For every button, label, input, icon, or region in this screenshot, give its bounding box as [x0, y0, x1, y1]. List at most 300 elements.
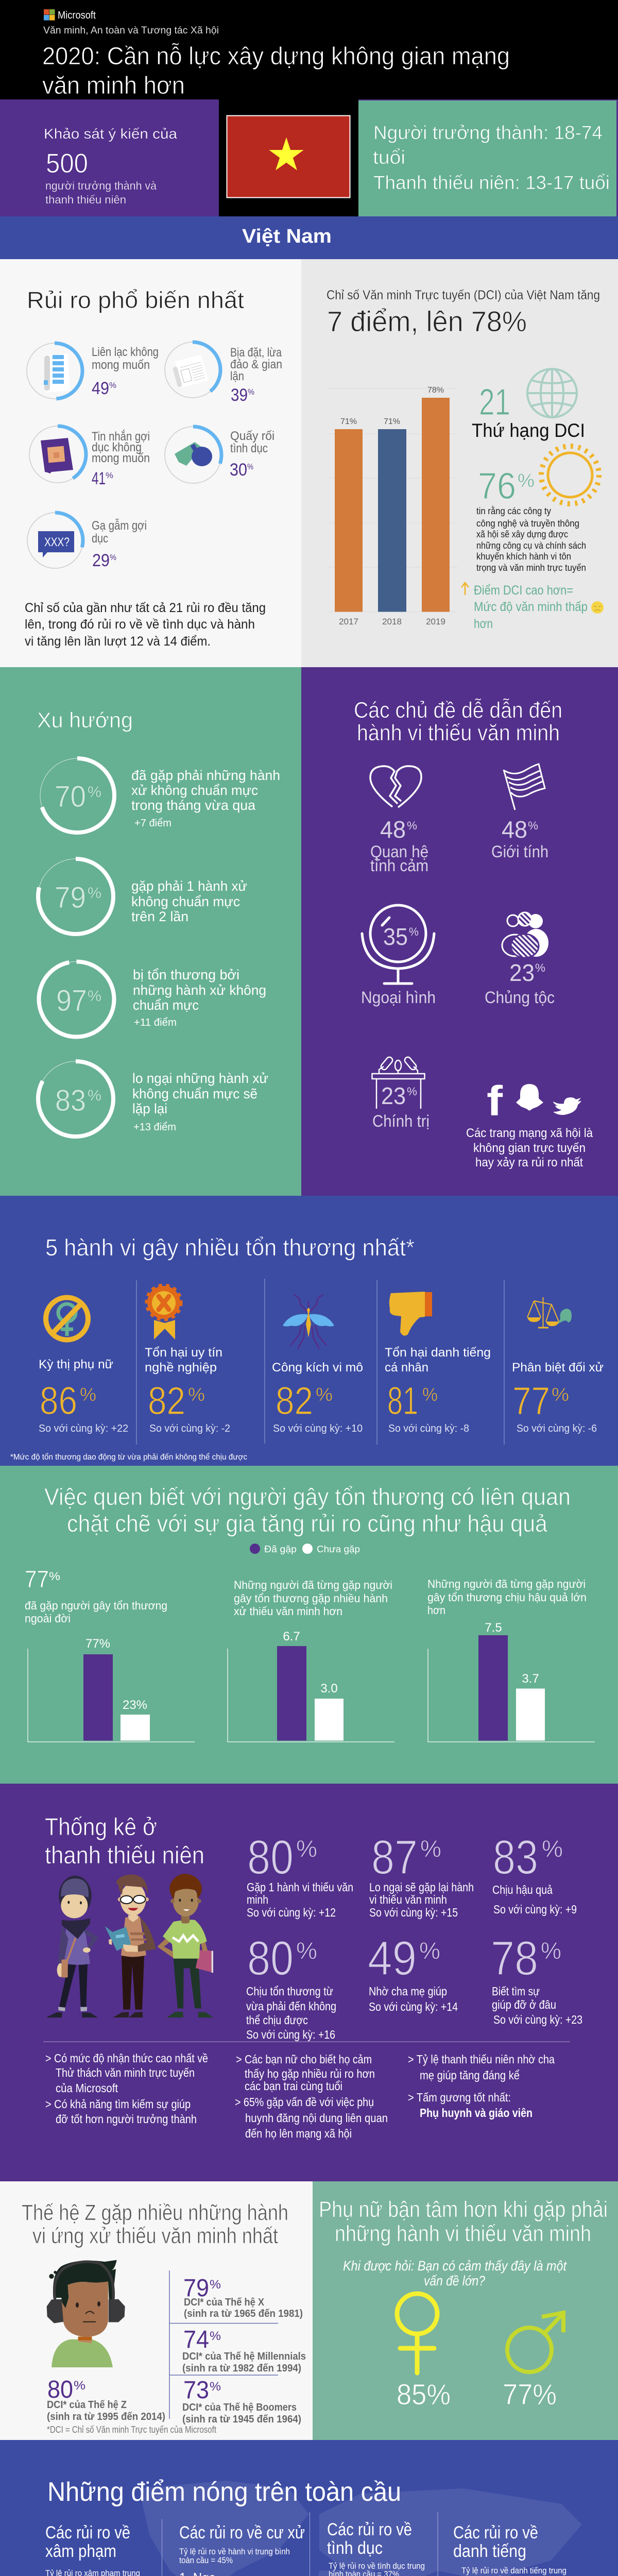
- behaviour: misogyny: 86: [40, 1379, 77, 1423]
- risk: hoaxes and fraud: %: [248, 388, 254, 397]
- stat text: help: So với cùng kỳ: +23: [493, 2013, 582, 2026]
- bullets column 1: của Microsoft: [56, 2081, 118, 2095]
- topic: politics: 23: [381, 1082, 406, 1109]
- panel: survey: Khảo sát ý kiến của: [44, 126, 177, 142]
- topic: appearance: [361, 905, 436, 1007]
- behaviour: misogyny: [39, 1297, 128, 1434]
- bullets column 2: thấy họ gặp nhiều rủi ro hơn: [245, 2067, 375, 2080]
- optimism text: tin rằng các công ty: [476, 505, 551, 516]
- icon: Microsoft logo: [44, 9, 55, 21]
- legend note: hơn: [474, 617, 493, 631]
- panel: survey: 500: [46, 148, 88, 179]
- stat text: worried: [369, 1880, 474, 1919]
- stat text: worried: Lo ngại sẽ gặp lại hành: [369, 1880, 474, 1894]
- behaviour: microaggression: So với cùng kỳ: +10: [273, 1423, 363, 1434]
- panel: women more concerned: [319, 2197, 608, 2411]
- risk: unwanted sexting: Tin nhắn gợi: [92, 430, 150, 444]
- behaviour: microaggression: %: [316, 1384, 333, 1405]
- topic: gender: Giới tính: [491, 842, 548, 861]
- risk: sexual solicitation: %: [110, 553, 116, 562]
- behaviour: microaggression: [272, 1295, 363, 1434]
- topic: gender: %: [528, 819, 538, 832]
- heading: thanh thiếu niên: [45, 1841, 204, 1869]
- column: sexual risks: [327, 2520, 425, 2576]
- social caption: không gian trực tuyến: [473, 1141, 586, 1155]
- stat: Gen X: (sinh ra từ 1965 đến 1981): [184, 2308, 303, 2319]
- topic: race: Chủng tộc: [485, 988, 555, 1007]
- stat: Millennials: 74: [183, 2326, 209, 2353]
- heading: Các chủ đề dễ dẫn đến: [354, 698, 562, 723]
- risk: hoaxes and fraud: 39: [231, 385, 248, 405]
- DCI rank: 21: [479, 382, 510, 423]
- behaviour: professional reputation: 82: [148, 1379, 185, 1423]
- trend 97%: bị tổn thương bởi: [133, 967, 239, 982]
- figure: boy in green shirt: [157, 1874, 213, 2018]
- legend note: Điểm DCI cao hơn=: [474, 583, 573, 598]
- trend 70%: đã gặp phải những hành: [131, 768, 280, 783]
- bar chart: behaviours experienced: [228, 1630, 394, 1742]
- stats row 2: 78: [491, 1931, 538, 1985]
- stat: Gen X: %: [210, 2278, 221, 2292]
- column: sexual risks: Các rủi ro về: [327, 2520, 412, 2539]
- optimism text: khuyến khích hành vi tôn: [476, 551, 571, 562]
- behaviour: personal reputation: [385, 1292, 491, 1434]
- chart note: more behaviours: Những người đã từng gặp người: [234, 1579, 392, 1591]
- risk: sexual harassment: tình dục: [230, 442, 268, 455]
- chart note: more behaviours: gây tổn thương gặp nhiều hành: [234, 1592, 388, 1605]
- panel: survey: người trưởng thành và: [45, 179, 157, 192]
- behaviour: personal reputation: 81: [387, 1379, 418, 1423]
- stat: Gen Z: 80: [47, 2376, 73, 2403]
- stat text: help: Biết tìm sự: [492, 1985, 540, 1998]
- icon: globe: [527, 369, 577, 417]
- stats row 1: 87: [371, 1830, 418, 1884]
- trend 83%: 83: [55, 1084, 86, 1117]
- topic: politics: %: [407, 1085, 417, 1098]
- behaviour: personal reputation: Tổn hại danh tiếng: [385, 1346, 491, 1360]
- topic: appearance: %: [409, 925, 419, 938]
- behaviour: discrimination: Phân biệt đối xử: [512, 1361, 604, 1375]
- bar chart: behaviours experienced: 6.7: [283, 1630, 300, 1643]
- stat: Gen Z: %: [74, 2379, 85, 2393]
- stat text: encountered: Gặp 1 hành vi thiếu văn: [247, 1880, 353, 1894]
- stat text: encountered: So với cùng kỳ: +12: [247, 1906, 336, 1919]
- risk: sexual harassment: 30: [230, 460, 247, 480]
- stat text: encountered: [247, 1880, 353, 1919]
- column: intrusive risks: [45, 2523, 140, 2576]
- panel: ages: Người trưởng thành: 18-74: [373, 122, 603, 143]
- bullets column 1: Thử thách văn minh trực tuyến: [56, 2066, 195, 2079]
- stat: Millennials: %: [210, 2329, 221, 2343]
- trend 83%: %: [88, 1087, 101, 1104]
- icon: male symbol: [507, 2313, 563, 2372]
- trend 97%: những hành xử không: [133, 982, 266, 998]
- heading: [319, 2197, 608, 2246]
- panel: topics: [354, 698, 593, 1170]
- panel: most common risks: [25, 287, 282, 649]
- illustration: teen with headphones: [47, 2260, 125, 2367]
- optimism text: trọng và văn minh trực tuyến: [476, 563, 586, 573]
- icon: facebook: f: [487, 1078, 503, 1125]
- rank label: Thứ hạng DCI: [472, 420, 585, 441]
- chart note: greater consequences: gây tổn thương chịu hậu quả lớn: [427, 1591, 587, 1604]
- question: Khi được hỏi: Bạn có cảm thấy đây là một: [343, 2258, 567, 2274]
- chart note: more behaviours: xử thiếu văn minh hơn: [234, 1605, 342, 1618]
- risk: hoaxes and fraud: đảo & gian: [230, 358, 282, 371]
- title: 2020: Cần nỗ lực xây dựng không gian mạng: [42, 42, 510, 70]
- column: intrusive risks: Các rủi ro về: [45, 2523, 130, 2543]
- icon: Vietnam flag: [227, 115, 350, 198]
- stats row 2: %: [541, 1937, 561, 1964]
- topic: race: 23: [509, 959, 535, 986]
- optimism text: những công cụ và chính sách: [476, 540, 586, 551]
- stat: women: 85%: [397, 2378, 451, 2411]
- stat: Boomers: 73: [183, 2377, 209, 2404]
- behaviour: professional reputation: %: [188, 1384, 205, 1405]
- optimism text: công nghệ và truyền thông: [476, 518, 579, 529]
- illustration: three teens: [46, 1874, 213, 2018]
- risk: sexual solicitation: 29: [92, 551, 110, 570]
- world map: [139, 2481, 582, 2576]
- heading: [45, 1813, 204, 1869]
- stat text: worried: vi thiếu văn minh: [369, 1893, 447, 1906]
- panel: Generation Z: [22, 2200, 306, 2435]
- risk: hoaxes and fraud: lận: [230, 369, 244, 383]
- risk: unwanted sexting: mong muốn: [92, 451, 150, 465]
- risk: sexual harassment: [165, 427, 274, 483]
- stats row 1: %: [420, 1835, 441, 1862]
- stat: Millennials: [182, 2326, 306, 2374]
- risk: hoaxes and fraud: Bịa đặt, lừa: [230, 346, 282, 360]
- panel: global hot spots: [45, 2477, 582, 2576]
- heading: [22, 2200, 288, 2248]
- trend 70%: trong tháng vừa qua: [131, 798, 256, 813]
- bullets column 1: > Có mức độ nhận thức cao nhất về: [45, 2052, 208, 2065]
- column: behavioural risks: [179, 2523, 305, 2576]
- column: intrusive risks: xâm phạm: [45, 2541, 116, 2561]
- panel: teen statistics: [43, 1813, 582, 2140]
- topic: relationships: 48: [380, 816, 406, 843]
- column: behavioural risks: Các rủi ro về cư xử: [179, 2523, 305, 2543]
- summary paragraph: Chỉ số của gần như tất cả 21 rủi ro đều tăng: [25, 601, 266, 615]
- footnote: *Mức độ tổn thương dao động từ vừa phải đến không thể chịu được: [10, 1452, 247, 1462]
- bullets column 2: đến họ lên mạng xã hội: [245, 2127, 352, 2140]
- trend 83%: không chuẩn mực sẽ: [132, 1086, 258, 1101]
- panel: trends: [37, 708, 280, 1137]
- trend 79%: 79: [55, 881, 86, 914]
- risk: unwanted contact: Liên lạc không: [92, 345, 159, 359]
- bullets column 3: > Tỷ lệ thanh thiếu niên nhờ cha: [408, 2053, 555, 2066]
- stats row 1: %: [542, 1835, 563, 1862]
- bullets column 2: > 65% gặp vấn đề với việc phụ: [235, 2095, 374, 2109]
- stat: Gen X: DCI* của Thế hệ X: [184, 2297, 265, 2308]
- stat: men: 77%: [503, 2378, 557, 2411]
- topic: gender: 48: [502, 816, 527, 843]
- stat text: pain: vừa phải đến không: [246, 1999, 336, 2013]
- stat text: encountered: minh: [247, 1893, 268, 1906]
- panel: 5 most painful behaviours: [10, 1234, 604, 1462]
- risk: sexual solicitation: XXX?: [44, 535, 70, 549]
- footnote: *DCI = Chỉ số Văn minh Trực tuyến của Microsoft: [47, 2425, 216, 2435]
- optimism stat: 76: [478, 466, 516, 507]
- column: reputational risks: [453, 2523, 566, 2576]
- stat: Boomers: %: [210, 2380, 221, 2394]
- panel: knowing the offender: [25, 1483, 595, 1742]
- DCI heading: [327, 288, 600, 337]
- risk: sexual harassment: Quấy rối: [230, 429, 274, 443]
- behaviour: discrimination: %: [552, 1384, 569, 1405]
- stats row 1: [247, 1830, 563, 1884]
- behaviour: discrimination: 77: [512, 1379, 550, 1423]
- risk: hoaxes and fraud: [165, 342, 282, 405]
- trend 97%: %: [88, 988, 101, 1005]
- topic: politics: [372, 1056, 430, 1130]
- risk: sexual solicitation: [27, 513, 147, 570]
- panel: survey: thanh thiếu niên: [45, 193, 126, 206]
- trend 97%: +11 điểm: [134, 1017, 177, 1028]
- heading: Thống kê ở: [45, 1813, 157, 1840]
- trend 70%: [40, 758, 280, 833]
- panel: DCI: [327, 288, 604, 631]
- trend 79%: [38, 859, 247, 934]
- summary paragraph: lên, trong đó rủi ro về về tình dục và hành: [25, 617, 255, 632]
- chart note: greater consequences: [427, 1578, 587, 1617]
- behaviour: microaggression: 82: [276, 1379, 313, 1423]
- behaviour: professional reputation: So với cùng kỳ: -2: [149, 1423, 230, 1434]
- topic: relationships: Quan hệ: [370, 842, 428, 861]
- bullets column 2: > Các bạn nữ cho biết họ cảm: [236, 2053, 372, 2066]
- subtitle: Văn minh, An toàn và Tương tác Xã hội: [43, 25, 219, 36]
- heading: vi ứng xử thiếu văn minh nhất: [32, 2224, 278, 2248]
- risk: unwanted sexting: %: [106, 471, 113, 480]
- stat: Gen X: [183, 2275, 303, 2319]
- risk: sexual solicitation: dục: [92, 532, 108, 546]
- trend 79%: %: [88, 885, 101, 902]
- stat text: consequences: Chịu hậu quả: [492, 1883, 553, 1896]
- question: [343, 2258, 567, 2289]
- column: reputational risks: Các rủi ro về: [453, 2523, 538, 2543]
- legend note: [474, 583, 588, 631]
- optimism text: xã hội sẽ xây dựng được: [476, 529, 568, 539]
- bullets column 3: mẹ giúp tăng đáng kể: [420, 2069, 520, 2082]
- column: behavioural risks: Tỷ lệ rủi ro về hành vi trung bình: [179, 2547, 290, 2556]
- stat: Boomers: DCI* của Thế hệ Boomers: [182, 2402, 297, 2413]
- bar chart: met offender: 77%: [85, 1637, 110, 1651]
- topic: appearance: Ngoại hình: [361, 988, 436, 1007]
- bar chart: behaviours experienced: 3.0: [320, 1682, 338, 1696]
- stat: Millennials: DCI* của Thế hệ Millennials: [182, 2351, 306, 2362]
- trend 97%: [39, 961, 266, 1037]
- trend 79%: trên 2 lần: [131, 909, 188, 924]
- stat: Millennials: (sinh ra từ 1982 đến 1994): [182, 2363, 301, 2374]
- risk: unwanted contact: [27, 343, 159, 399]
- chart note: greater consequences: hơn: [427, 1604, 445, 1617]
- heading: chặt chẽ với sự gia tăng rủi ro cũng như hậu quả: [67, 1510, 547, 1537]
- stat: 77%: 77: [25, 1566, 49, 1592]
- bar chart: DCI by year: [328, 386, 457, 626]
- social caption: [466, 1126, 593, 1170]
- bar chart: consequences: 3.7: [522, 1672, 539, 1686]
- stat text: pain: Chịu tổn thương từ: [246, 1985, 333, 1998]
- bar chart: DCI by year: 2019: [426, 617, 445, 626]
- stat text: pain: thể chịu được: [246, 2013, 308, 2027]
- stats row 2: 49: [368, 1931, 417, 1985]
- figure: girl in hijab: [46, 1876, 98, 2018]
- stats row 2: 80: [247, 1931, 294, 1985]
- risk: unwanted contact: %: [109, 381, 116, 390]
- stat text: parents: So với cùng kỳ: +14: [369, 2000, 458, 2013]
- heading: hành vi thiếu văn minh: [357, 720, 560, 745]
- stat: 77%: %: [49, 1570, 60, 1583]
- legend: Chưa gặp: [317, 1544, 360, 1554]
- trend 83%: +13 điểm: [133, 1122, 176, 1133]
- topic: politics: Chính trị: [372, 1112, 430, 1130]
- topic: relationships: tình cảm: [370, 856, 428, 875]
- bullets column 1: [45, 2052, 208, 2126]
- stat text: pain: [246, 1985, 336, 2041]
- bullets column 1: > Có khả năng tìm kiếm sự giúp: [45, 2097, 191, 2111]
- bar chart: consequences: 7.5: [485, 1621, 502, 1635]
- panel: survey: [44, 126, 177, 206]
- stat: Boomers: [182, 2377, 301, 2425]
- risk: unwanted sexting: 41: [92, 469, 106, 488]
- social caption: hay xảy ra rủi ro nhất: [475, 1156, 583, 1170]
- behaviour: microaggression: Công kích vi mô: [272, 1361, 363, 1375]
- trend 70%: xử không chuẩn mực: [131, 783, 258, 798]
- figure: boy with glasses: [105, 1874, 156, 2018]
- stat: Gen Z: DCI* của Thế hệ Z: [47, 2399, 127, 2411]
- behaviour: discrimination: [512, 1297, 604, 1434]
- heading: Những điểm nóng trên toàn cầu: [47, 2477, 401, 2507]
- stat: 77%: ngoài đời: [25, 1612, 71, 1625]
- behaviour: discrimination: So với cùng kỳ: -6: [517, 1423, 597, 1434]
- bar chart: DCI by year: 2018: [382, 617, 402, 626]
- behaviour: professional reputation: [145, 1285, 230, 1434]
- stat text: worried: So với cùng kỳ: +15: [369, 1906, 458, 1919]
- stat text: consequences: [492, 1883, 577, 1916]
- behaviour: professional reputation: nghề nghiệp: [145, 1361, 217, 1375]
- bullets column 1: đỡ tốt hơn người trưởng thành: [56, 2112, 197, 2126]
- bar chart: DCI by year: 78%: [427, 386, 444, 395]
- icon: sun: [541, 446, 599, 504]
- risk: unwanted sexting: [29, 426, 150, 488]
- behaviour: misogyny: %: [80, 1384, 96, 1405]
- trend 70%: %: [88, 784, 101, 801]
- chart note: more behaviours: [234, 1579, 392, 1618]
- heading: 5 hành vi gây nhiều tổn thương nhất*: [45, 1234, 415, 1261]
- panel: ages: [373, 122, 610, 193]
- arrow: higher score: [461, 583, 469, 595]
- summary paragraph: [25, 601, 266, 649]
- topic: race: [485, 912, 555, 1007]
- stats row 1: 80: [247, 1830, 294, 1884]
- stat text: help: giúp đỡ ở đâu: [492, 1998, 556, 2011]
- bar chart: met offender: [28, 1637, 195, 1742]
- optimism stat: %: [518, 470, 535, 491]
- icon: frown emoji: [591, 601, 604, 614]
- stats row 2: %: [296, 1937, 317, 1964]
- stats row 1: 83: [493, 1830, 538, 1884]
- icon: female symbol: [397, 2294, 437, 2373]
- column: reputational risks: danh tiếng: [453, 2541, 526, 2561]
- stat: 77%: [25, 1566, 167, 1625]
- question: vấn đề lớn?: [424, 2273, 485, 2289]
- bullets column 3: > Tấm gương tốt nhất:: [408, 2091, 511, 2104]
- logo text: Microsoft: [58, 10, 96, 21]
- title: [42, 42, 510, 99]
- panel: ages: tuổi: [373, 147, 405, 168]
- panel: ages: Thanh thiếu niên: 13-17 tuổi: [373, 172, 610, 193]
- heading: Việc quen biết với người gây tổn thương có liên quan: [44, 1483, 571, 1510]
- stat text: consequences: So với cùng kỳ: +9: [493, 1903, 577, 1916]
- topic: gender: [491, 764, 548, 861]
- column: behavioural risks: toàn cầu = 45%: [179, 2555, 233, 2565]
- heading: Thế hệ Z gặp nhiều những hành: [22, 2200, 288, 2225]
- bullets column 2: huynh đăng nội dung liên quan: [245, 2111, 388, 2125]
- header: [42, 9, 510, 99]
- optimism text: [476, 505, 586, 573]
- heading: Xu hướng: [37, 708, 133, 732]
- trend 70%: 70: [55, 780, 86, 814]
- bullets column 3: Phụ huynh và giáo viên: [420, 2106, 533, 2120]
- trend 97%: chuẩn mực: [133, 997, 199, 1013]
- trend 83%: lo ngại những hành xử: [132, 1071, 268, 1086]
- column: sexual risks: Tỷ lệ rủi ro về tình dục trung: [329, 2561, 425, 2571]
- risk: sexual harassment: %: [247, 463, 253, 471]
- stat: Gen Z: (sinh ra từ 1995 đến 2014): [47, 2411, 165, 2422]
- behaviour: professional reputation: Tổn hại uy tín: [145, 1346, 222, 1360]
- risk: unwanted contact: mong muốn: [92, 358, 150, 372]
- stat text: parents: Nhờ cha mẹ giúp: [369, 1985, 447, 1998]
- bar chart: DCI by year: 71%: [340, 417, 357, 426]
- column: reputational risks: Tỷ lệ rủi ro về danh tiếng trung: [461, 2566, 566, 2575]
- country heading: Việt Nam: [242, 226, 332, 247]
- bullets column 3: [408, 2053, 555, 2120]
- bar chart: DCI by year: 71%: [384, 417, 400, 426]
- topic: relationships: [370, 766, 428, 875]
- chart note: greater consequences: Những người đã từng gặp người: [427, 1578, 586, 1590]
- behaviour: misogyny: So với cùng kỳ: +22: [39, 1423, 128, 1434]
- risk: unwanted contact: 49: [92, 379, 109, 398]
- trend 83%: [38, 1061, 268, 1137]
- stat text: help: [492, 1985, 582, 2026]
- stats row 2: %: [419, 1937, 440, 1964]
- trend 79%: gặp phải 1 hành xử: [131, 878, 247, 894]
- risk: sexual solicitation: Gạ gẫm gợi: [92, 519, 147, 533]
- risk: unwanted sexting: dục không: [92, 440, 142, 454]
- bullets column 2: [235, 2053, 388, 2140]
- bar chart: consequences: [428, 1621, 595, 1742]
- trend 97%: 97: [56, 984, 87, 1018]
- title: văn minh hơn: [42, 72, 185, 99]
- stat: Boomers: (sinh ra từ 1945 đến 1964): [182, 2414, 301, 2425]
- heading: [44, 1483, 571, 1537]
- trend 79%: không chuẩn mực: [131, 894, 240, 909]
- stat text: parents: [369, 1985, 458, 2013]
- column: sexual risks: tình dục: [327, 2538, 383, 2558]
- trend 70%: +7 điểm: [134, 818, 171, 829]
- behaviour: misogyny: Kỳ thị phụ nữ: [39, 1358, 113, 1371]
- topic: appearance: 35: [383, 923, 408, 950]
- topic: race: %: [535, 961, 545, 974]
- stat: Gen Z: [47, 2376, 165, 2422]
- icon: snapchat: [516, 1084, 543, 1111]
- legend note: Mức độ văn minh thấp: [474, 600, 588, 614]
- topic: relationships: %: [407, 819, 417, 832]
- behaviour: personal reputation: %: [422, 1384, 438, 1405]
- trend 83%: lặp lại: [132, 1101, 167, 1116]
- behaviour: personal reputation: cá nhân: [385, 1361, 428, 1375]
